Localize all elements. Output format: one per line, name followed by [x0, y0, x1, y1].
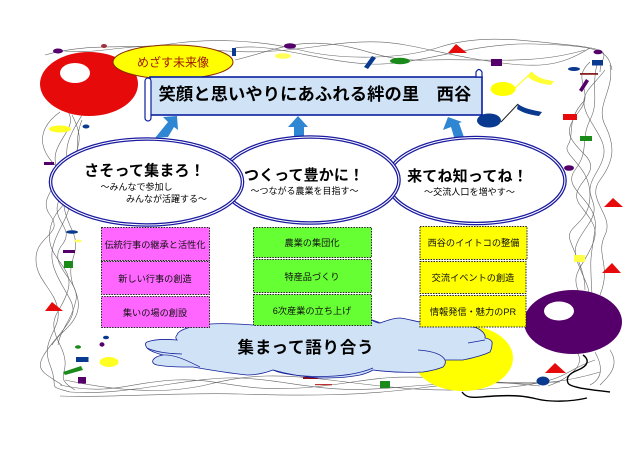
green boxes: agriculture: 農業の集団化	[284, 237, 340, 248]
circle: left: ～みんなで参加し	[100, 181, 173, 192]
goal badge: めざす未来像	[137, 54, 209, 70]
arrow: right	[443, 117, 466, 147]
circle: center: つくって豊かに！	[244, 166, 364, 184]
circle: center: ～つながる農業を目指す～	[250, 185, 359, 196]
circle: right: 来てね知ってね！	[407, 167, 528, 185]
circle: left	[50, 139, 242, 225]
balloon strings	[462, 355, 610, 401]
green boxes: agriculture: 6次産業の立ち上げ	[273, 305, 351, 316]
goal badge	[113, 45, 233, 79]
confetti shapes	[44, 43, 623, 388]
green boxes: agriculture: 特産品づくり	[284, 271, 340, 282]
circle: center	[221, 137, 399, 223]
circle: right: ～交流人口を増やす～	[424, 186, 515, 197]
wavy streamers border	[36, 39, 614, 396]
yellow boxes: exchange: 西谷のイイトコの整備	[428, 237, 519, 248]
music note: yellow	[490, 72, 554, 96]
circle: left: さそって集まろ！	[84, 162, 205, 180]
pink boxes: events	[102, 228, 210, 328]
circle: left: みんなが活躍する～	[126, 193, 207, 204]
pink boxes: events: 伝統行事の継承と活性化	[104, 239, 206, 250]
arrow: left	[155, 116, 178, 138]
title banner: 笑顔と思いやりにあふれる絆の里 西谷	[158, 84, 471, 104]
title banner	[145, 70, 482, 121]
circle: right	[387, 138, 565, 224]
red balloon	[40, 52, 138, 116]
yellow boxes: exchange: 交流イベントの創造	[432, 272, 514, 283]
yellow boxes: exchange	[420, 226, 527, 327]
pink boxes: events: 新しい行事の創造	[118, 273, 192, 284]
cloud: talk together: 集まって語り合う	[238, 338, 374, 357]
music note: navy	[477, 104, 542, 128]
yellow boxes: exchange: 情報発信・魅力のPR	[430, 306, 516, 317]
cloud: talk together	[146, 318, 492, 378]
arrow: center	[288, 116, 308, 144]
purple balloon	[524, 290, 622, 354]
pink boxes: events: 集いの場の創設	[123, 307, 187, 318]
green boxes: agriculture	[254, 228, 372, 326]
yellow moon	[413, 325, 513, 391]
